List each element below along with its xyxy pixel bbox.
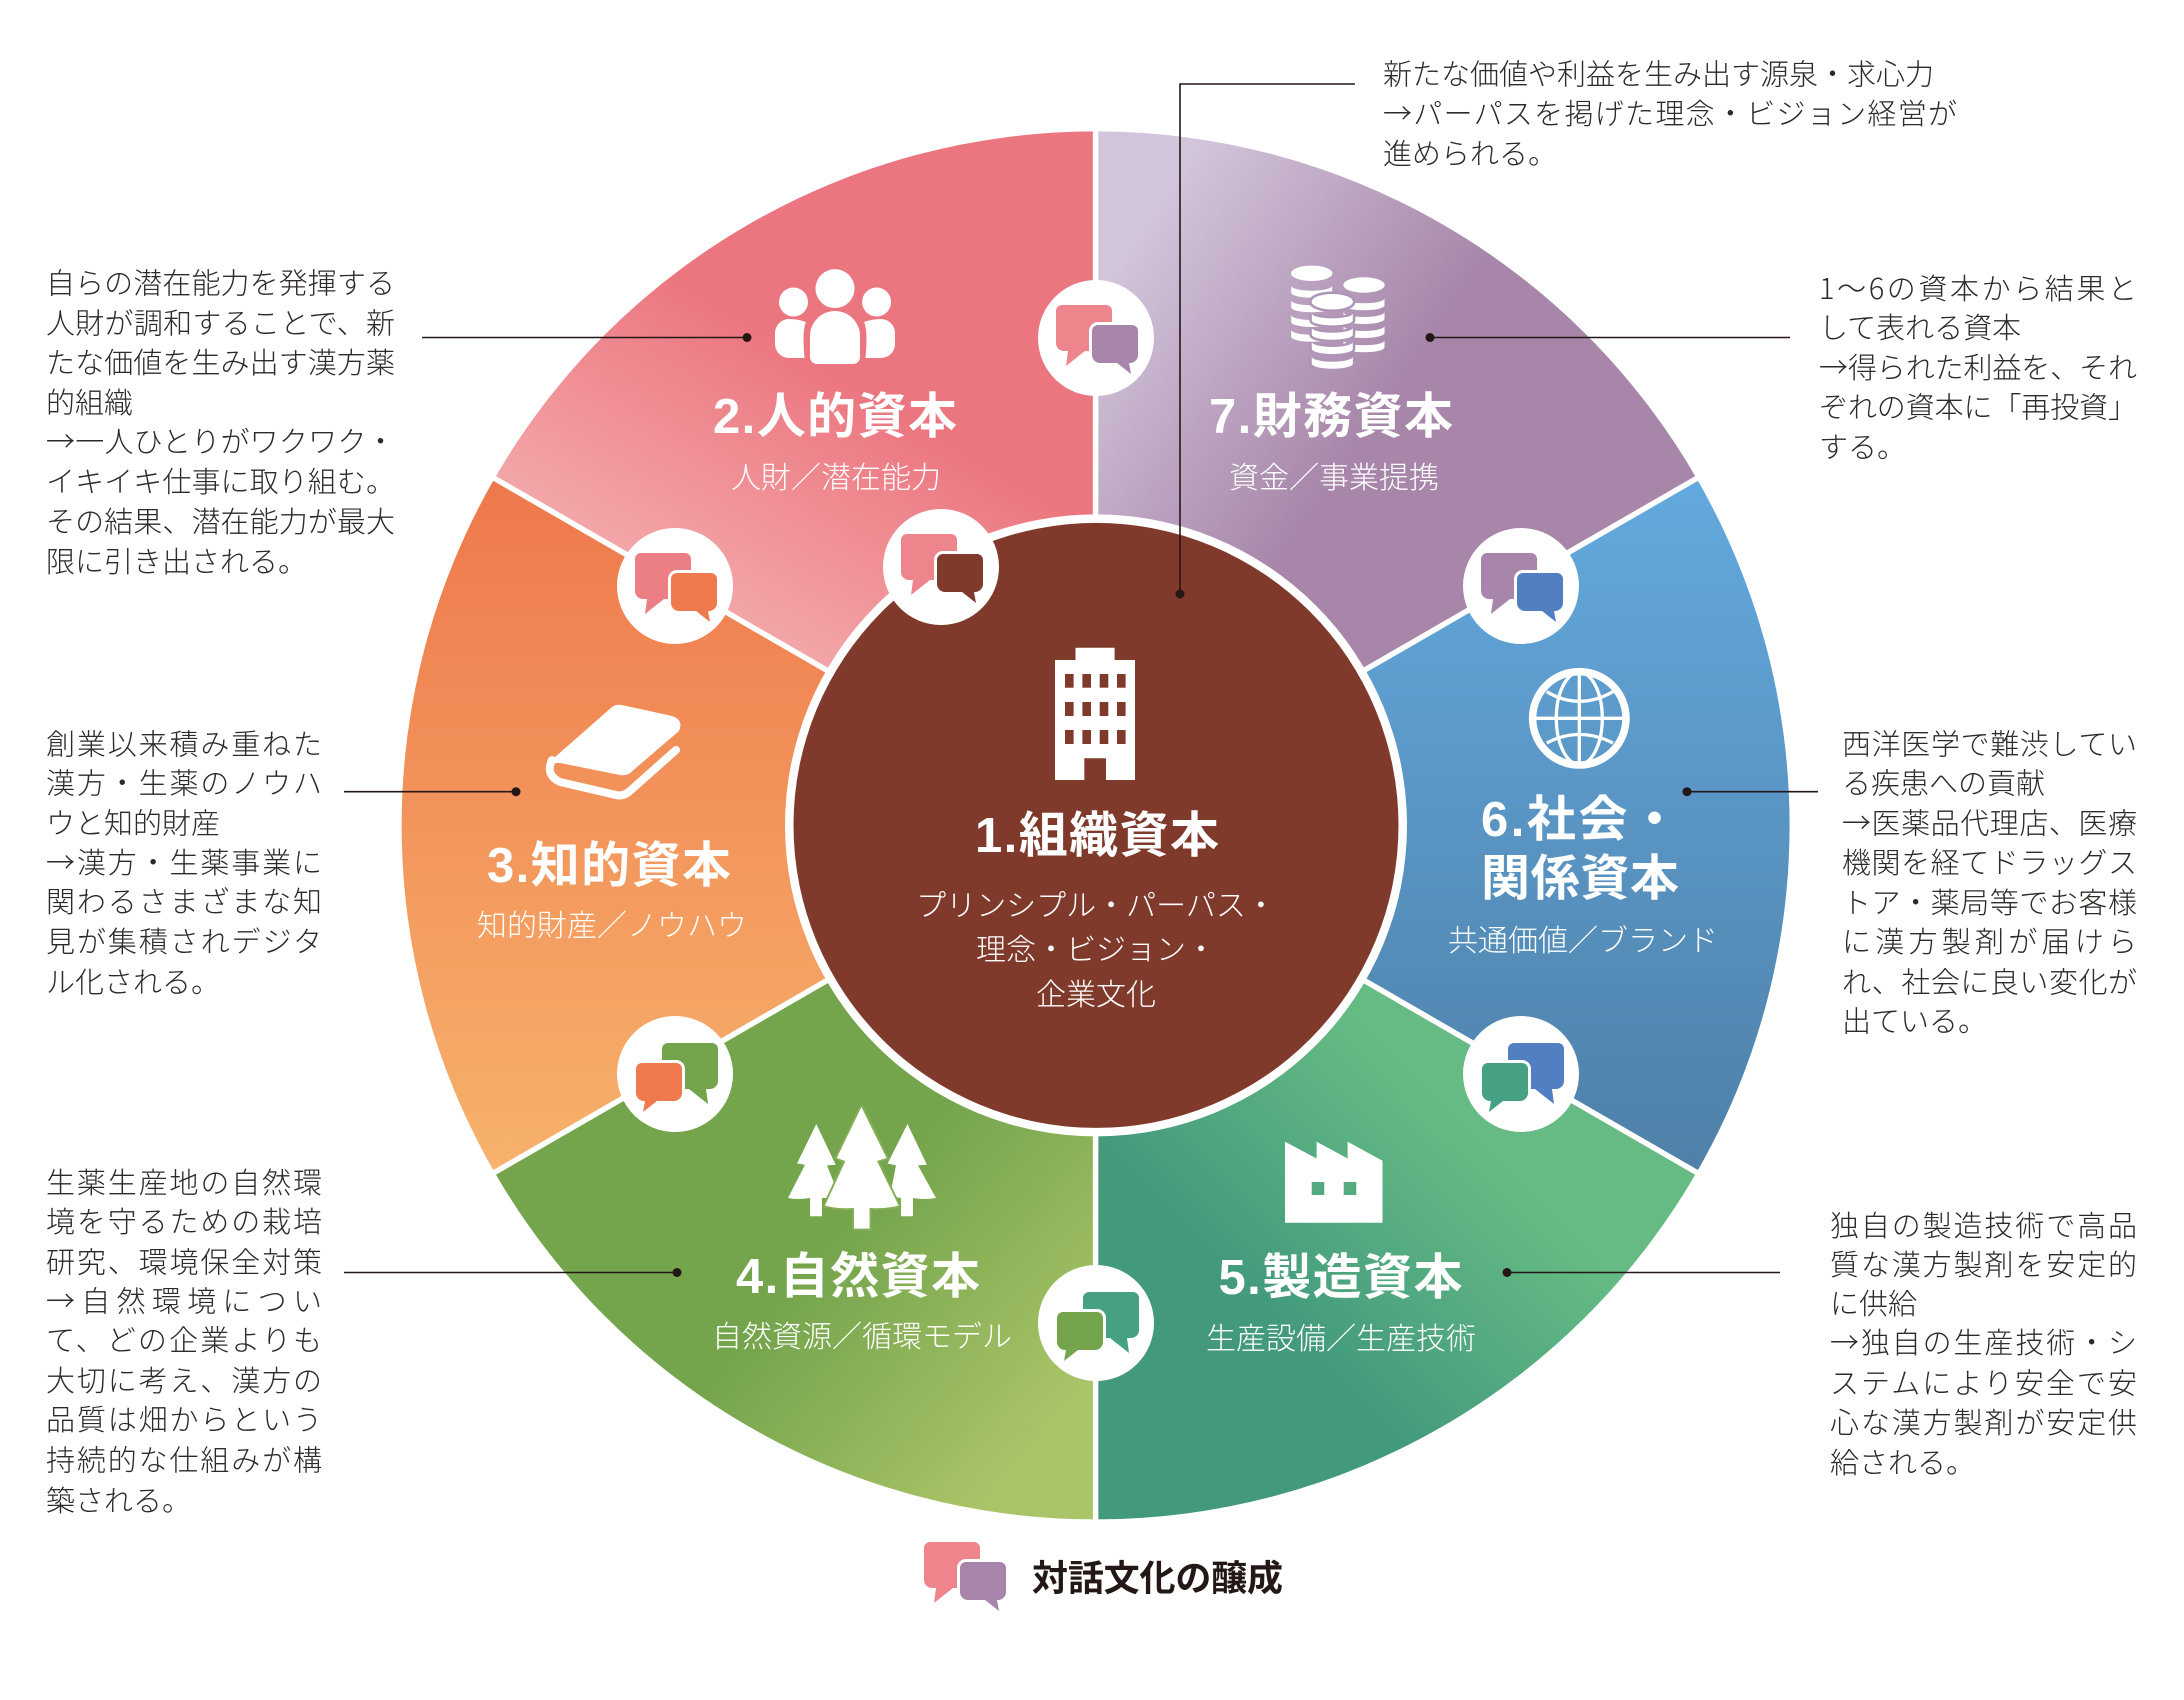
legend icon: speech bubbles: [924, 1542, 1006, 1611]
heading: 5 manufacturing capital: 5.製造資本: [1218, 1251, 1462, 1305]
text block: human capital description: 自らの潜在能力を発揮する: [46, 268, 395, 300]
text block: human capital description: たな価値を生み出す漢方薬: [46, 347, 395, 380]
heading: 2 human capital: 2.人的資本: [713, 390, 957, 444]
text block: human capital description: その結果、潜在能力が最大: [46, 506, 395, 539]
heading: 6 social and relationship capital: 6.社会・: [1481, 793, 1679, 847]
icon: globe: [1533, 672, 1626, 765]
sublabel: financial capital: 資金／事業提携: [1229, 462, 1439, 495]
leader line: manufacturing capital: [1502, 1268, 1780, 1277]
text block: social capital description: →医薬品代理店、医療: [1842, 800, 2137, 842]
text block: intellectual capital description: ル化される。: [46, 968, 220, 1000]
text block: human capital description: 限に引き出される。: [46, 546, 307, 579]
text block: natural capital description: 大切に考え、漢方の: [46, 1365, 322, 1398]
dialogue node: intellectual and natural: [617, 1016, 733, 1132]
heading: 3 intellectual capital: 3.知的資本: [487, 839, 731, 893]
text block: manufacturing capital description: 独自の製造技術で高品: [1830, 1210, 2137, 1243]
text block: manufacturing capital description: ステムにより安全で安: [1830, 1368, 2137, 1400]
sublabel: organizational capital: 企業文化: [1036, 979, 1156, 1012]
wedge: financial capital: [1096, 131, 1697, 825]
text block: natural capital description: 研究、環境保全対策: [46, 1246, 322, 1280]
text block: organizational capital description: 新たな価値や利益を生み出す源泉・求心力: [1383, 58, 1934, 92]
heading: 7 financial capital: 7.財務資本: [1209, 390, 1453, 444]
text block: natural capital description: て、どの企業よりも: [46, 1326, 322, 1358]
sublabel: natural capital: 自然資源／循環モデル: [712, 1321, 1012, 1354]
sublabel: social capital: 共通価値／ブランド: [1448, 925, 1718, 958]
text block: social capital description: トア・薬局等でお客様: [1842, 887, 2137, 920]
text block: social capital description: 西洋医学で難渋してい: [1842, 728, 2137, 762]
text block: manufacturing capital description: に供給: [1830, 1288, 1917, 1321]
dialogue node: social and manufacturing: [1463, 1016, 1579, 1132]
icon: coins: [1291, 266, 1385, 369]
text block: manufacturing capital description: 心な漢方製剤が安定供: [1830, 1407, 2137, 1440]
dialogue node: human and organizational: [883, 509, 999, 625]
wedge: intellectual capital: [402, 478, 1096, 1172]
text block: intellectual capital description: 創業以来積み重ねた: [46, 728, 322, 762]
text block: organizational capital description: 進められる。: [1383, 138, 1557, 171]
sublabel: organizational capital: プリンシプル・パーパス・: [916, 890, 1276, 923]
text block: financial capital description: 1〜6の資本から結果と: [1819, 266, 2137, 308]
text block: social capital description: [1842, 728, 2137, 1038]
text block: manufacturing capital description: 質な漢方製剤を安定的: [1830, 1249, 2137, 1282]
text block: human capital description: 的組織: [46, 387, 133, 420]
icon: trees: [788, 1107, 936, 1229]
text block: natural capital description: 築される。: [46, 1485, 191, 1518]
text block: social capital description: に漢方製剤が届けら: [1842, 926, 2137, 959]
leader line: financial capital: [1426, 333, 1790, 342]
text block: natural capital description: →自然環境につい: [46, 1278, 322, 1320]
icon: book: [546, 705, 680, 795]
icon: factory: [1285, 1142, 1382, 1223]
text block: social capital description: 出ている。: [1842, 1006, 1987, 1038]
dialogue node: natural and manufacturing: [1038, 1265, 1154, 1381]
text block: financial capital description: する。: [1819, 432, 1906, 464]
text block: financial capital description: →得られた利益を、それ: [1819, 345, 2137, 387]
text block: manufacturing capital description: →独自の生産技術・シ: [1830, 1320, 2137, 1362]
text block: human capital description: 人財が調和することで、新: [46, 308, 395, 340]
leader line: intellectual capital: [344, 787, 520, 796]
sublabel: intellectual capital: 知的財産／ノウハウ: [477, 910, 747, 943]
text block: natural capital description: 生薬生産地の自然環: [46, 1167, 322, 1200]
icon: people: [775, 269, 895, 364]
text block: social capital description: 機関を経てドラッグス: [1842, 847, 2137, 880]
icon: office building: [1055, 648, 1135, 780]
text block: human capital description: [46, 268, 395, 579]
heading: 6 social and relationship capital: 関係資本: [1481, 852, 1679, 906]
dialogue node: financial and social: [1463, 528, 1579, 644]
text block: intellectual capital description: →漢方・生薬事業に: [46, 840, 322, 882]
text block: natural capital description: 品質は畑からという: [46, 1404, 322, 1437]
text block: natural capital description: [46, 1167, 322, 1518]
text block: financial capital description: [1819, 266, 2137, 464]
text block: intellectual capital description: ウと知的財産: [46, 808, 220, 840]
wedge: social capital: [1096, 478, 1790, 1172]
dialogue node: human and intellectual: [617, 528, 733, 644]
dialogue node: human and financial: [1038, 280, 1154, 396]
text block: intellectual capital description: 見が集積されデジタ: [46, 926, 322, 959]
text block: manufacturing capital description: [1830, 1210, 2137, 1480]
leader line: financial top text to organizational capital: [1176, 84, 1355, 598]
sublabel: organizational capital: [916, 890, 1276, 1012]
text block: organizational capital description: →パーパスを掲げた理念・ビジョン経営が: [1383, 91, 1957, 133]
wedge: human capital: [495, 131, 1096, 825]
wedge: natural capital: [495, 825, 1096, 1519]
sublabel: organizational capital: 理念・ビジョン・: [976, 934, 1216, 967]
text block: manufacturing capital description: 給される。: [1830, 1447, 1975, 1480]
legend label: 対話文化の醸成: [1032, 1558, 1283, 1598]
text block: natural capital description: 持続的な仕組みが構: [46, 1444, 322, 1478]
heading: 4 natural capital: 4.自然資本: [736, 1250, 980, 1304]
text block: social capital description: れ、社会に良い変化が: [1842, 966, 2137, 1000]
wedge: manufacturing capital: [1096, 825, 1697, 1519]
leader line: human capital: [422, 333, 752, 342]
text block: human capital description: イキイキ仕事に取り組む。: [46, 466, 395, 499]
text block: social capital description: る疾患への貢献: [1842, 768, 2045, 800]
center circle: organizational capital: [785, 514, 1407, 1136]
heading: 6 social and relationship capital: [1481, 793, 1679, 906]
text block: natural capital description: 境を守るための栽培: [46, 1206, 322, 1239]
sublabel: human capital: 人財／潜在能力: [731, 462, 941, 495]
leader line: natural capital: [344, 1268, 682, 1277]
text block: intellectual capital description: 関わるさまざまな知: [46, 886, 322, 919]
text block: intellectual capital description: [46, 728, 322, 1000]
text block: organizational capital description: [1383, 58, 1957, 171]
heading: 1 organizational capital: 1.組織資本: [975, 809, 1219, 863]
text block: financial capital description: して表れる資本: [1819, 312, 2021, 345]
text block: human capital description: →一人ひとりがワクワク・: [46, 419, 395, 461]
leader line: social capital: [1682, 787, 1818, 796]
text block: financial capital description: ぞれの資本に「再投資」: [1819, 392, 2137, 424]
sublabel: manufacturing capital: 生産設備／生産技術: [1206, 1323, 1476, 1356]
text block: intellectual capital description: 漢方・生薬のノウハ: [46, 768, 322, 800]
